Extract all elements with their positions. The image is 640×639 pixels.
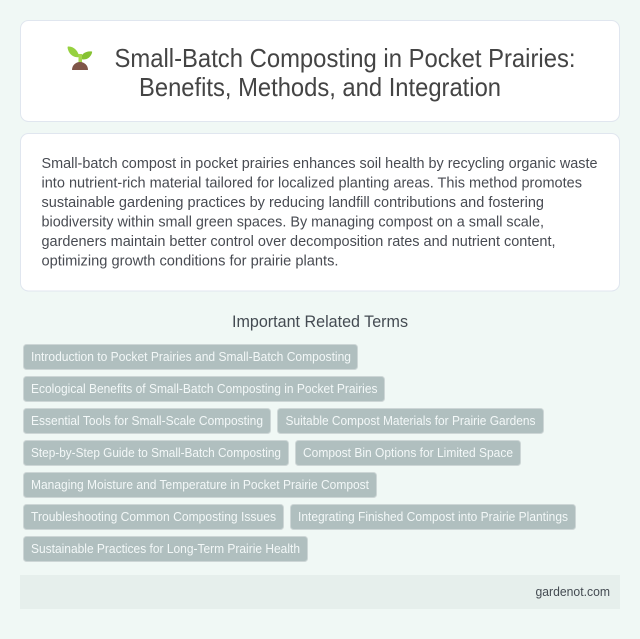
title heading: Small-Batch Composting in Pocket Prairies: [114,43,576,73]
tag [24,344,358,370]
summary paragraph: biodiversity within small green spaces. By managing compost on a small scale, [42,214,544,230]
tag [24,376,384,402]
tag [24,504,284,530]
tag [24,440,288,466]
tag: Compost Bin Options for Limited Space [303,445,513,460]
tag [278,408,544,434]
tag: Managing Moisture and Temperature in Pocket Prairie Compost [31,477,369,492]
panel: title card [20,20,620,122]
footer source text: gardenot.com [536,584,610,599]
title heading [114,43,576,102]
footer [20,575,620,609]
tag list: related terms [24,344,576,562]
tag: Essential Tools for Small-Scale Composting [31,413,263,428]
panel: summary text [20,134,620,291]
tag: Sustainable Practices for Long-Term Prairie Health [31,541,300,556]
tag: Troubleshooting Common Composting Issues [31,509,276,524]
summary paragraph: gardeners maintain better control over decomposition rates and nutrient content, [42,233,556,250]
tag: Introduction to Pocket Prairies and Small-Batch Composting [31,349,351,364]
tag [24,408,270,434]
tag: Step-by-Step Guide to Small-Batch Composting [31,445,281,460]
summary paragraph: sustainable gardening practices by reducing landfill contributions and fostering [42,194,544,211]
tag [24,536,308,562]
title heading: Benefits, Methods, and Integration [139,72,501,102]
tag: Ecological Benefits of Small-Batch Composting in Pocket Prairies [31,381,378,396]
summary paragraph: into nutrient-rich material tailored for localized planting areas. This method promotes [42,174,582,192]
section heading: related terms: Important Related Terms [232,312,408,331]
summary paragraph: optimizing growth conditions for prairie plants. [42,252,338,270]
tag [290,504,576,530]
summary paragraph: Small-batch compost in pocket prairies enhances soil health by recycling organic waste [42,155,598,172]
tag: Integrating Finished Compost into Prairie Plantings [298,509,568,524]
tag [24,472,376,498]
tag: Suitable Compost Materials for Prairie Gardens [286,413,536,428]
summary paragraph [42,155,598,270]
tag [296,440,520,466]
icon: seedling [68,46,92,70]
